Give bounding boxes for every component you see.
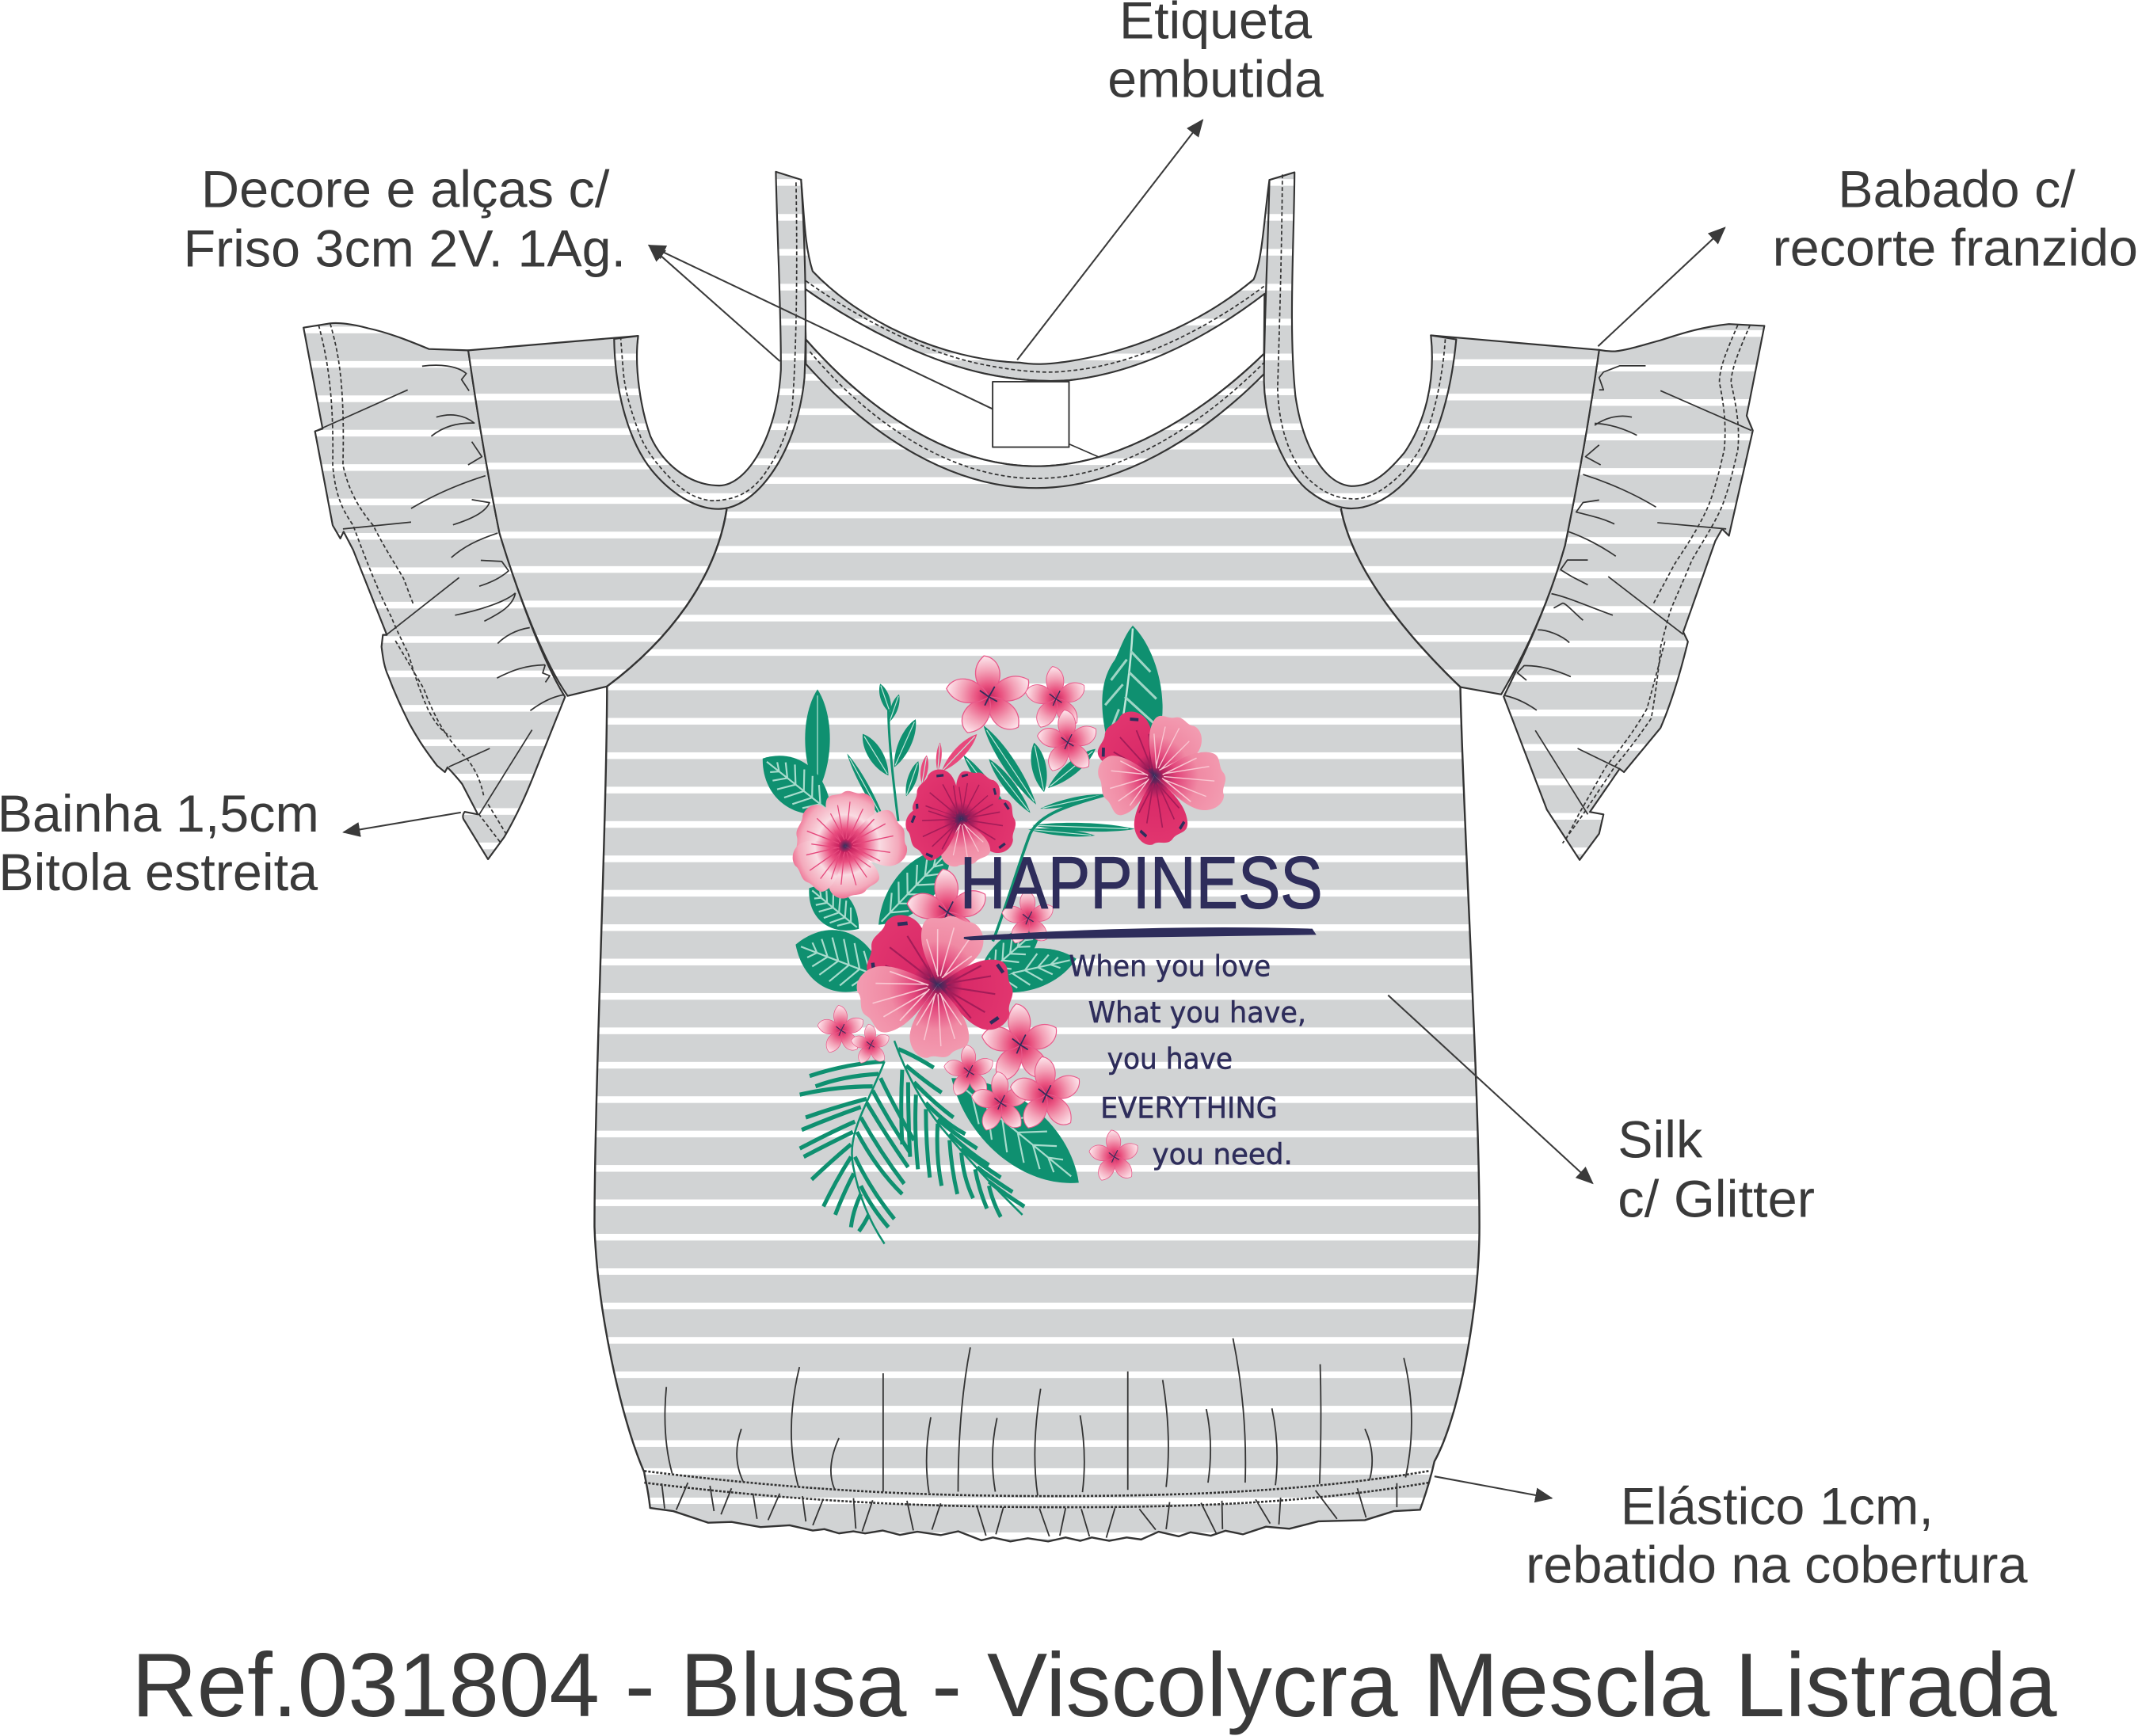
palm frond right (898, 1049, 1024, 1217)
arrow: decore to strap (649, 246, 780, 361)
arrow: silk (1388, 996, 1592, 1183)
right ruffle gathers (1503, 366, 1751, 814)
right strap and armhole binding (1264, 173, 1456, 508)
right ruffle (1503, 324, 1764, 860)
hibiscus flower: large lower (853, 906, 1018, 1058)
stitching lines (318, 174, 1750, 843)
label: bainha: Bainha 1,5cm (0, 785, 319, 843)
print brush underline (964, 928, 1314, 939)
label: silk: c/ Glitter (1618, 1170, 1815, 1228)
front neck band (806, 340, 1265, 488)
garment: blouse technical drawing (303, 172, 1764, 1548)
label: babado: recorte franzido (1773, 219, 2138, 278)
right sleeve cap (1341, 335, 1599, 695)
print text: slogan: What you have, (1088, 996, 1306, 1030)
label: elastico (1526, 1477, 2028, 1594)
label: etiqueta embutida (1107, 0, 1324, 109)
label: decore e alças: Decore e alças c/ (201, 161, 610, 219)
arrow: babado (1598, 227, 1725, 346)
pink buds (918, 730, 981, 785)
title: Ref.031804 - Blusa - Viscolycra Mescla Listrada (131, 1635, 2057, 1736)
green leaves (749, 626, 1163, 1206)
hibiscus flower: upper centre deep (901, 763, 1019, 869)
left strap and armhole binding (614, 172, 806, 509)
plumeria flowers (816, 656, 1141, 1183)
body outline (594, 508, 1480, 1541)
arrow: bainha (344, 813, 461, 832)
inner label tag (993, 382, 1069, 447)
arrow: etiqueta (1017, 120, 1202, 360)
back neck band (801, 180, 1270, 381)
label: decore e alças (184, 161, 626, 279)
label: babado: Babado c/ (1838, 161, 2075, 219)
label: decore e alças: Friso 3cm 2V. 1Ag. (184, 220, 626, 279)
hibiscus flower: top right (1089, 704, 1228, 847)
print text: slogan (1069, 949, 1306, 1171)
left ruffle gathers (315, 365, 564, 814)
arrow: elastico (1435, 1476, 1552, 1498)
label: etiqueta embutida: embutida (1107, 51, 1324, 109)
body front (594, 340, 1480, 1509)
inner neck line behind tag (1069, 444, 1101, 458)
label: silk (1618, 1110, 1815, 1228)
arrows (344, 120, 1725, 1498)
hibiscus flower: left pale (787, 788, 909, 902)
palm frond left (800, 1061, 914, 1232)
label: bainha: Bitola estreita (0, 843, 318, 902)
label: babado (1773, 161, 2138, 278)
print text: slogan: EVERYTHING (1100, 1091, 1278, 1125)
label: elastico: rebatido na cobertura (1526, 1536, 2028, 1594)
hem area with its own stripes (643, 1468, 1432, 1540)
silk print: tropical flowers (749, 626, 1228, 1244)
hem gathers and elastic stitching (644, 1338, 1429, 1538)
print text: slogan: When you love (1069, 949, 1271, 983)
print text: slogan: you have (1107, 1042, 1233, 1076)
label: bainha (0, 785, 319, 902)
open neck interior (805, 288, 1264, 466)
print text: HAPPINESS: HAPPINESS (960, 841, 1323, 923)
arrow: decore to neck (649, 246, 993, 409)
left sleeve cap (468, 336, 726, 696)
label: silk: Silk (1618, 1110, 1703, 1169)
label: elastico: Elástico 1cm, (1621, 1477, 1934, 1536)
print text: slogan: you need. (1152, 1137, 1293, 1171)
left ruffle (303, 323, 565, 859)
